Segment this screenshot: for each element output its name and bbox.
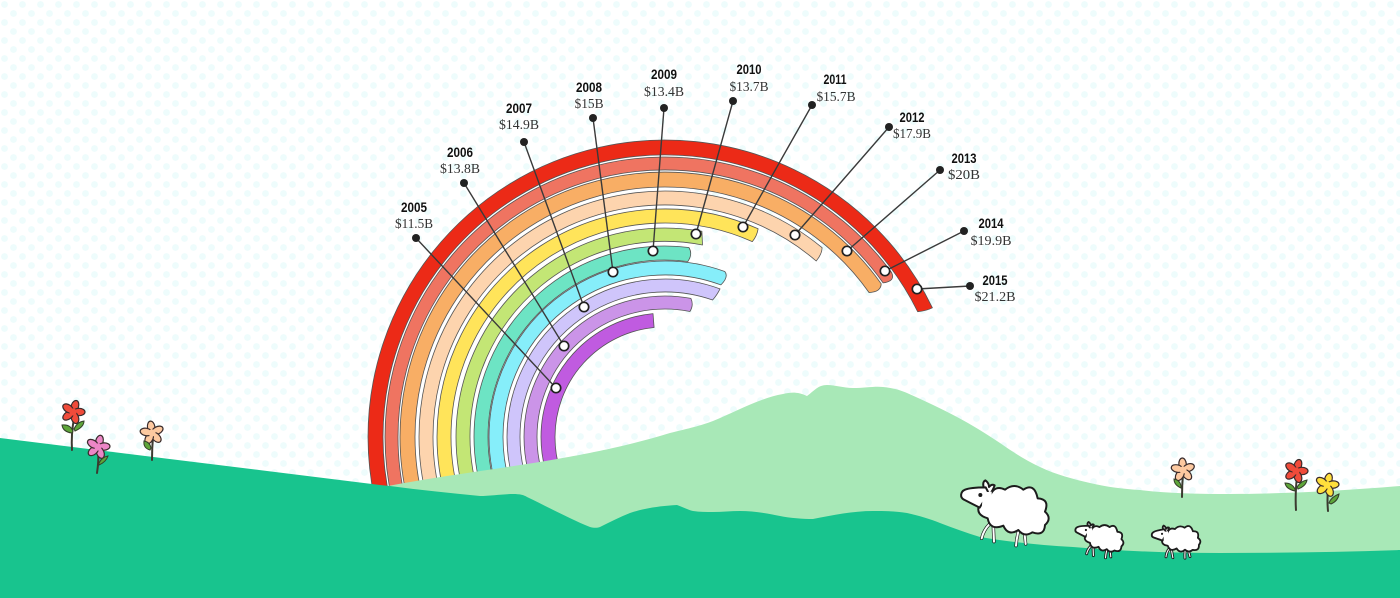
- band 2006 purple: [524, 296, 692, 500]
- sheep: large: [961, 480, 1049, 546]
- flower: pink left: [83, 432, 113, 473]
- label 2009: 2009: [651, 66, 677, 82]
- band 2007 lavender: [507, 279, 720, 500]
- label 2015: $21.2B: [974, 290, 1016, 305]
- label 2013: 2013: [952, 150, 977, 166]
- flower: red left: [57, 397, 89, 450]
- label 2005: [395, 199, 433, 232]
- label 2006: [440, 144, 480, 177]
- label 2007: $14.9B: [499, 118, 539, 133]
- label 2012: [893, 109, 931, 142]
- label 2012: $17.9B: [893, 127, 931, 142]
- label 2015: 2015: [982, 272, 1008, 288]
- label 2008: 2008: [576, 79, 602, 95]
- band 2012 peach: [419, 191, 822, 500]
- flower: yellow right: [1312, 470, 1342, 511]
- dark green front hill: [0, 438, 1400, 598]
- band 2011 yellow: [437, 209, 758, 500]
- label 2014: [970, 215, 1012, 249]
- label 2005: $11.5B: [395, 217, 433, 232]
- label 2012: 2012: [900, 109, 925, 125]
- band 2014 salmon: [385, 157, 893, 500]
- leader 2015: [912, 282, 974, 294]
- flower: peach right: [1170, 457, 1196, 497]
- light green back hill: [388, 385, 1400, 598]
- leader 2008: [589, 114, 618, 277]
- leader 2013: [842, 166, 944, 256]
- leader 2009: [648, 104, 668, 256]
- label 2014: $19.9B: [970, 234, 1012, 249]
- label 2010: [730, 61, 768, 95]
- label 2006: 2006: [447, 144, 473, 160]
- leader 2012: [790, 123, 893, 240]
- label 2008: [574, 79, 604, 112]
- label 2010: 2010: [736, 61, 762, 77]
- label 2011: $15.7B: [816, 90, 856, 105]
- label 2007: 2007: [506, 100, 532, 116]
- label 2006: $13.8B: [440, 162, 480, 177]
- band 2013 orange: [400, 172, 881, 500]
- band 2008 cyan: [489, 261, 726, 500]
- label 2005: 2005: [401, 199, 427, 215]
- label 2009: $13.4B: [644, 85, 684, 100]
- flower: red right: [1280, 456, 1312, 510]
- band 2005 magenta: [541, 314, 654, 500]
- label 2010: $13.7B: [730, 80, 768, 95]
- label 2008: $15B: [574, 97, 604, 112]
- label 2011: 2011: [824, 71, 847, 87]
- label 2007: [499, 100, 539, 133]
- band 2010 green: [456, 228, 702, 500]
- label 2013: [948, 150, 980, 183]
- band 2009 teal: [474, 246, 691, 500]
- leader 2006: [460, 179, 569, 351]
- label 2015: [974, 272, 1016, 305]
- leader 2005: [412, 234, 561, 393]
- leader 2014: [880, 227, 968, 276]
- label 2014: 2014: [978, 215, 1004, 231]
- leader 2007: [520, 138, 589, 312]
- sheep: small right: [1151, 521, 1202, 562]
- leader 2011: [738, 101, 816, 232]
- flower: peach left: [138, 419, 166, 460]
- leader 2010: [691, 97, 737, 239]
- label 2013: $20B: [948, 168, 980, 183]
- sheep: small middle: [1075, 522, 1123, 558]
- label 2009: [644, 66, 684, 100]
- rainbow chart: yearly values 2005 to 2015: [368, 61, 1016, 500]
- band 2015 red: [368, 140, 932, 500]
- label 2011: [816, 71, 856, 105]
